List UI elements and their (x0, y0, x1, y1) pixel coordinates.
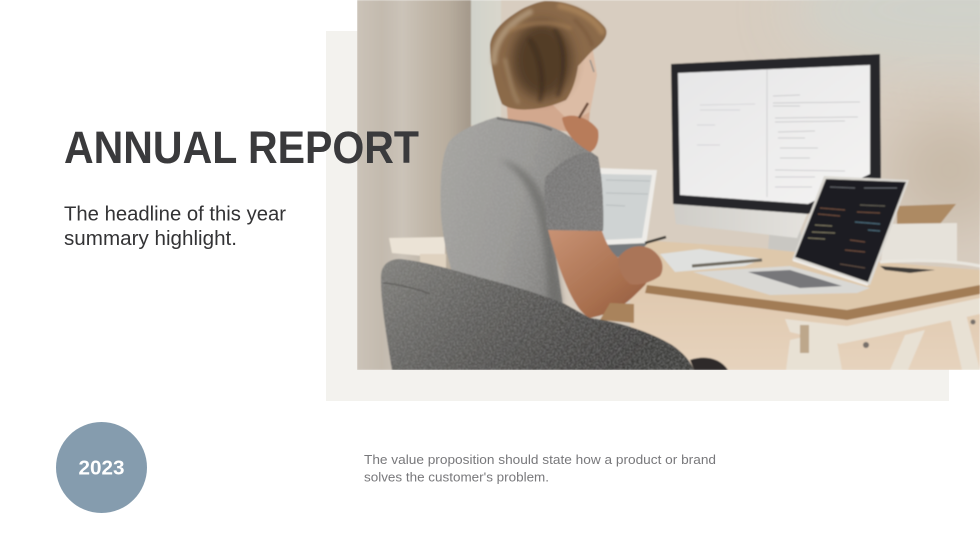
document lines (773, 95, 860, 187)
year badge (56, 422, 147, 513)
glasses (590, 60, 594, 72)
hinge line (793, 260, 868, 285)
typing hand (618, 246, 663, 285)
background panel (326, 31, 949, 401)
laptop base (693, 266, 870, 295)
table support behind chair (600, 303, 634, 323)
upper arm and forearm (548, 230, 660, 318)
year badge: 2023 (78, 458, 124, 480)
cable and clutter (880, 261, 980, 266)
subtitle: The headline of this year (64, 202, 286, 226)
subtitle (64, 202, 286, 250)
wall cool highlight top right (790, 0, 980, 65)
desk legs far left (420, 254, 446, 268)
code lines (808, 187, 897, 268)
white desk far left (389, 237, 445, 258)
neck (506, 104, 590, 132)
hair dark core (512, 22, 572, 98)
sleeve (545, 153, 603, 231)
chair (381, 259, 694, 370)
laptop screen (795, 179, 906, 282)
legs under desk (690, 358, 728, 370)
chin hand (562, 116, 599, 152)
wall shadow right (890, 115, 980, 225)
wooden box (897, 204, 956, 224)
face (548, 45, 597, 122)
right laptop (693, 176, 909, 295)
subtitle: summary highlight. (64, 227, 237, 250)
chair seam (383, 283, 430, 294)
hair strands (494, 6, 602, 102)
monitor chin (674, 205, 807, 238)
hair (490, 1, 607, 110)
laptop lid rim (792, 176, 909, 285)
wall (470, 0, 980, 327)
keyboard (748, 270, 842, 288)
notebook on desk (660, 249, 763, 272)
desk top (645, 240, 980, 286)
monitor (671, 54, 881, 252)
monitor screen (678, 65, 870, 204)
value proposition text: The value proposition should state how a product or brand (364, 452, 716, 467)
centre column line (766, 70, 768, 197)
small laptop base (603, 243, 648, 258)
title: ANNUAL REPORT (64, 122, 419, 173)
wall under desk (630, 285, 980, 370)
pen on notebook (692, 260, 762, 266)
finger (579, 103, 588, 118)
desk front edge (645, 285, 980, 320)
curtain (357, 0, 471, 370)
desk apron and trestles (785, 298, 980, 370)
monitor bezel (671, 54, 881, 214)
photo: man working at a desk with monitor and laptops (357, 0, 980, 370)
white box (881, 223, 957, 262)
small laptop lid (598, 168, 657, 248)
small laptop screen (600, 174, 652, 240)
value proposition text (364, 452, 716, 484)
collar (497, 118, 552, 130)
man (441, 1, 663, 318)
trestle shadows (800, 320, 976, 353)
sheer curtain (471, 0, 501, 125)
small laptop lines (606, 180, 650, 206)
t-shirt (441, 117, 603, 305)
monitor stand (768, 232, 801, 252)
stylus (645, 237, 666, 243)
shirt shadows (500, 160, 563, 305)
small laptop (598, 168, 666, 258)
value proposition text: solves the customer's problem. (364, 470, 549, 484)
